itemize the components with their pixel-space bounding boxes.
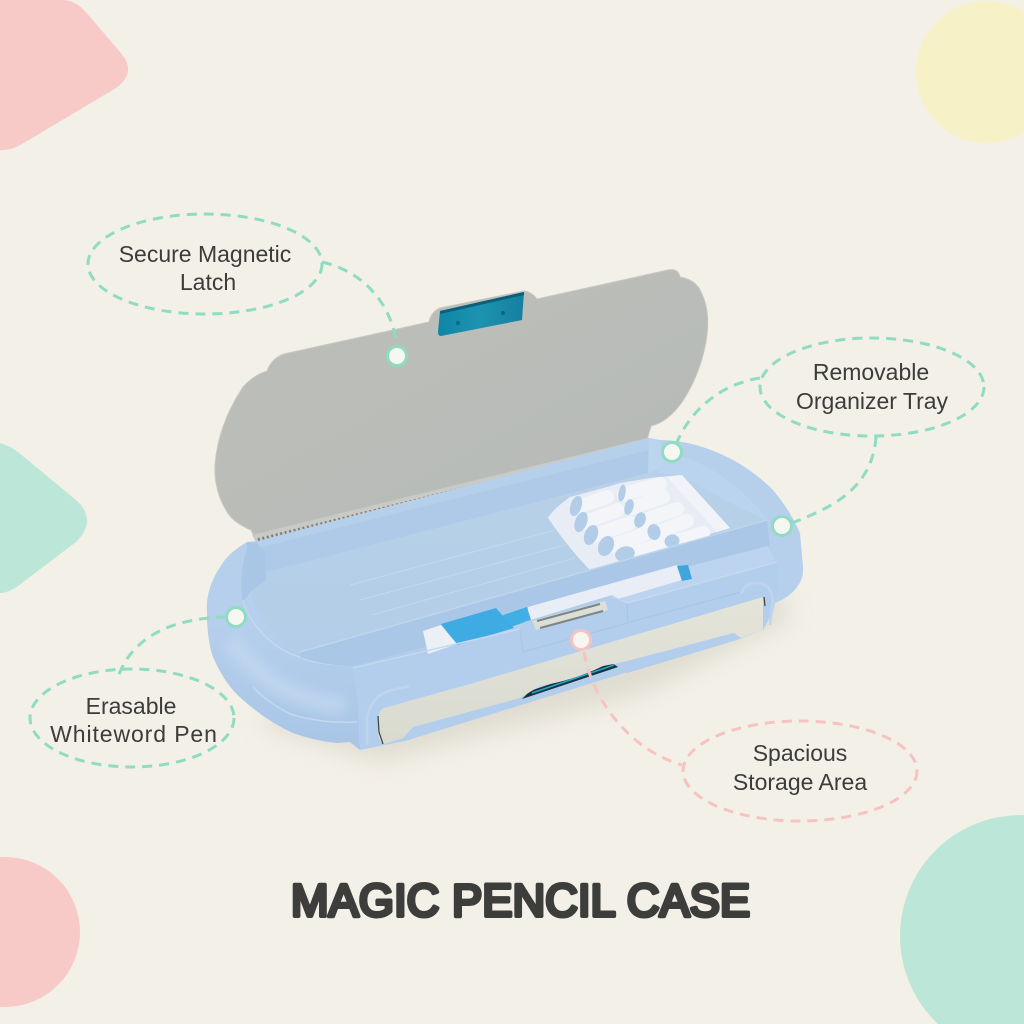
marker <box>572 630 590 650</box>
marker <box>226 608 246 626</box>
pen tip <box>677 565 692 581</box>
right corner post <box>648 438 664 474</box>
callout text: Storage Area <box>733 769 867 795</box>
tray body <box>548 475 730 570</box>
eraser <box>423 625 457 654</box>
decorative shape: mint circle bottom-right <box>900 815 1024 1024</box>
divider wall <box>300 520 770 666</box>
rim highlight <box>232 640 345 705</box>
floor ribs <box>350 530 575 615</box>
block top highlight <box>353 562 777 668</box>
magnetic latch <box>438 292 524 336</box>
title: MAGIC PENCIL CASE <box>291 875 750 926</box>
callout oval <box>683 721 917 821</box>
block shading <box>520 592 741 652</box>
whiteboard pen and eraser <box>423 565 692 654</box>
callout: removable organizer tray <box>662 338 984 536</box>
callout: secure magnetic latch <box>88 214 406 366</box>
callout text: Removable <box>813 359 929 385</box>
dark latch gap <box>522 663 618 699</box>
callout oval <box>30 669 234 767</box>
decorative shape: mint rounded triangle left <box>0 443 87 593</box>
decorative shape: yellow circle top-right <box>916 1 1024 143</box>
callout text: Erasable <box>86 693 176 719</box>
case base <box>207 438 803 750</box>
back wall <box>262 450 649 572</box>
callout text: Whiteword Pen <box>50 721 218 747</box>
connector <box>584 652 682 765</box>
left band arch <box>367 686 410 745</box>
connector to upper marker <box>677 378 760 442</box>
ivory clasp band <box>378 597 763 744</box>
marker <box>388 346 406 366</box>
connector to lower marker <box>792 437 876 523</box>
band end marks <box>378 597 765 744</box>
rim inner lip right <box>652 451 768 528</box>
pen channel right <box>620 546 776 604</box>
callout text: Spacious <box>753 740 847 766</box>
lower marker <box>772 516 792 536</box>
callout text: Latch <box>180 269 236 295</box>
tray cavity floor <box>250 473 767 652</box>
tray end ridge <box>667 475 730 532</box>
eraser sleeve <box>441 608 514 645</box>
lid panel <box>215 270 708 540</box>
upper marker <box>662 442 682 462</box>
hinge teeth <box>258 444 644 540</box>
decorative shape: pink rounded triangle top-left <box>0 0 128 150</box>
rim groove <box>253 687 357 722</box>
open lid <box>215 270 708 544</box>
front surface <box>353 562 778 750</box>
callout oval <box>88 214 322 314</box>
right band arch <box>741 583 773 625</box>
callout text: Secure Magnetic <box>119 241 291 267</box>
pencil case illustration <box>207 270 803 762</box>
left corner post <box>241 542 266 602</box>
hinge strip <box>252 438 649 544</box>
connector <box>322 262 397 346</box>
pen barrel <box>526 565 682 626</box>
tray holes <box>568 484 681 564</box>
callout: erasable whiteboard pen <box>30 608 246 767</box>
clip slots <box>537 604 603 628</box>
decorative shape: pink circle bottom-left <box>0 857 80 1007</box>
case shadow <box>260 590 790 762</box>
rim inner edge <box>243 600 353 665</box>
front blocks <box>353 562 778 750</box>
tray rollers <box>578 484 703 555</box>
divider top edge <box>300 520 767 652</box>
outer rim <box>207 438 803 750</box>
organizer tray <box>548 475 730 570</box>
callout: spacious storage area <box>572 630 917 821</box>
callout text: Organizer Tray <box>796 388 949 414</box>
connector <box>118 617 226 677</box>
pen neck <box>503 607 531 628</box>
callout oval <box>760 338 984 436</box>
clip window <box>532 601 608 630</box>
